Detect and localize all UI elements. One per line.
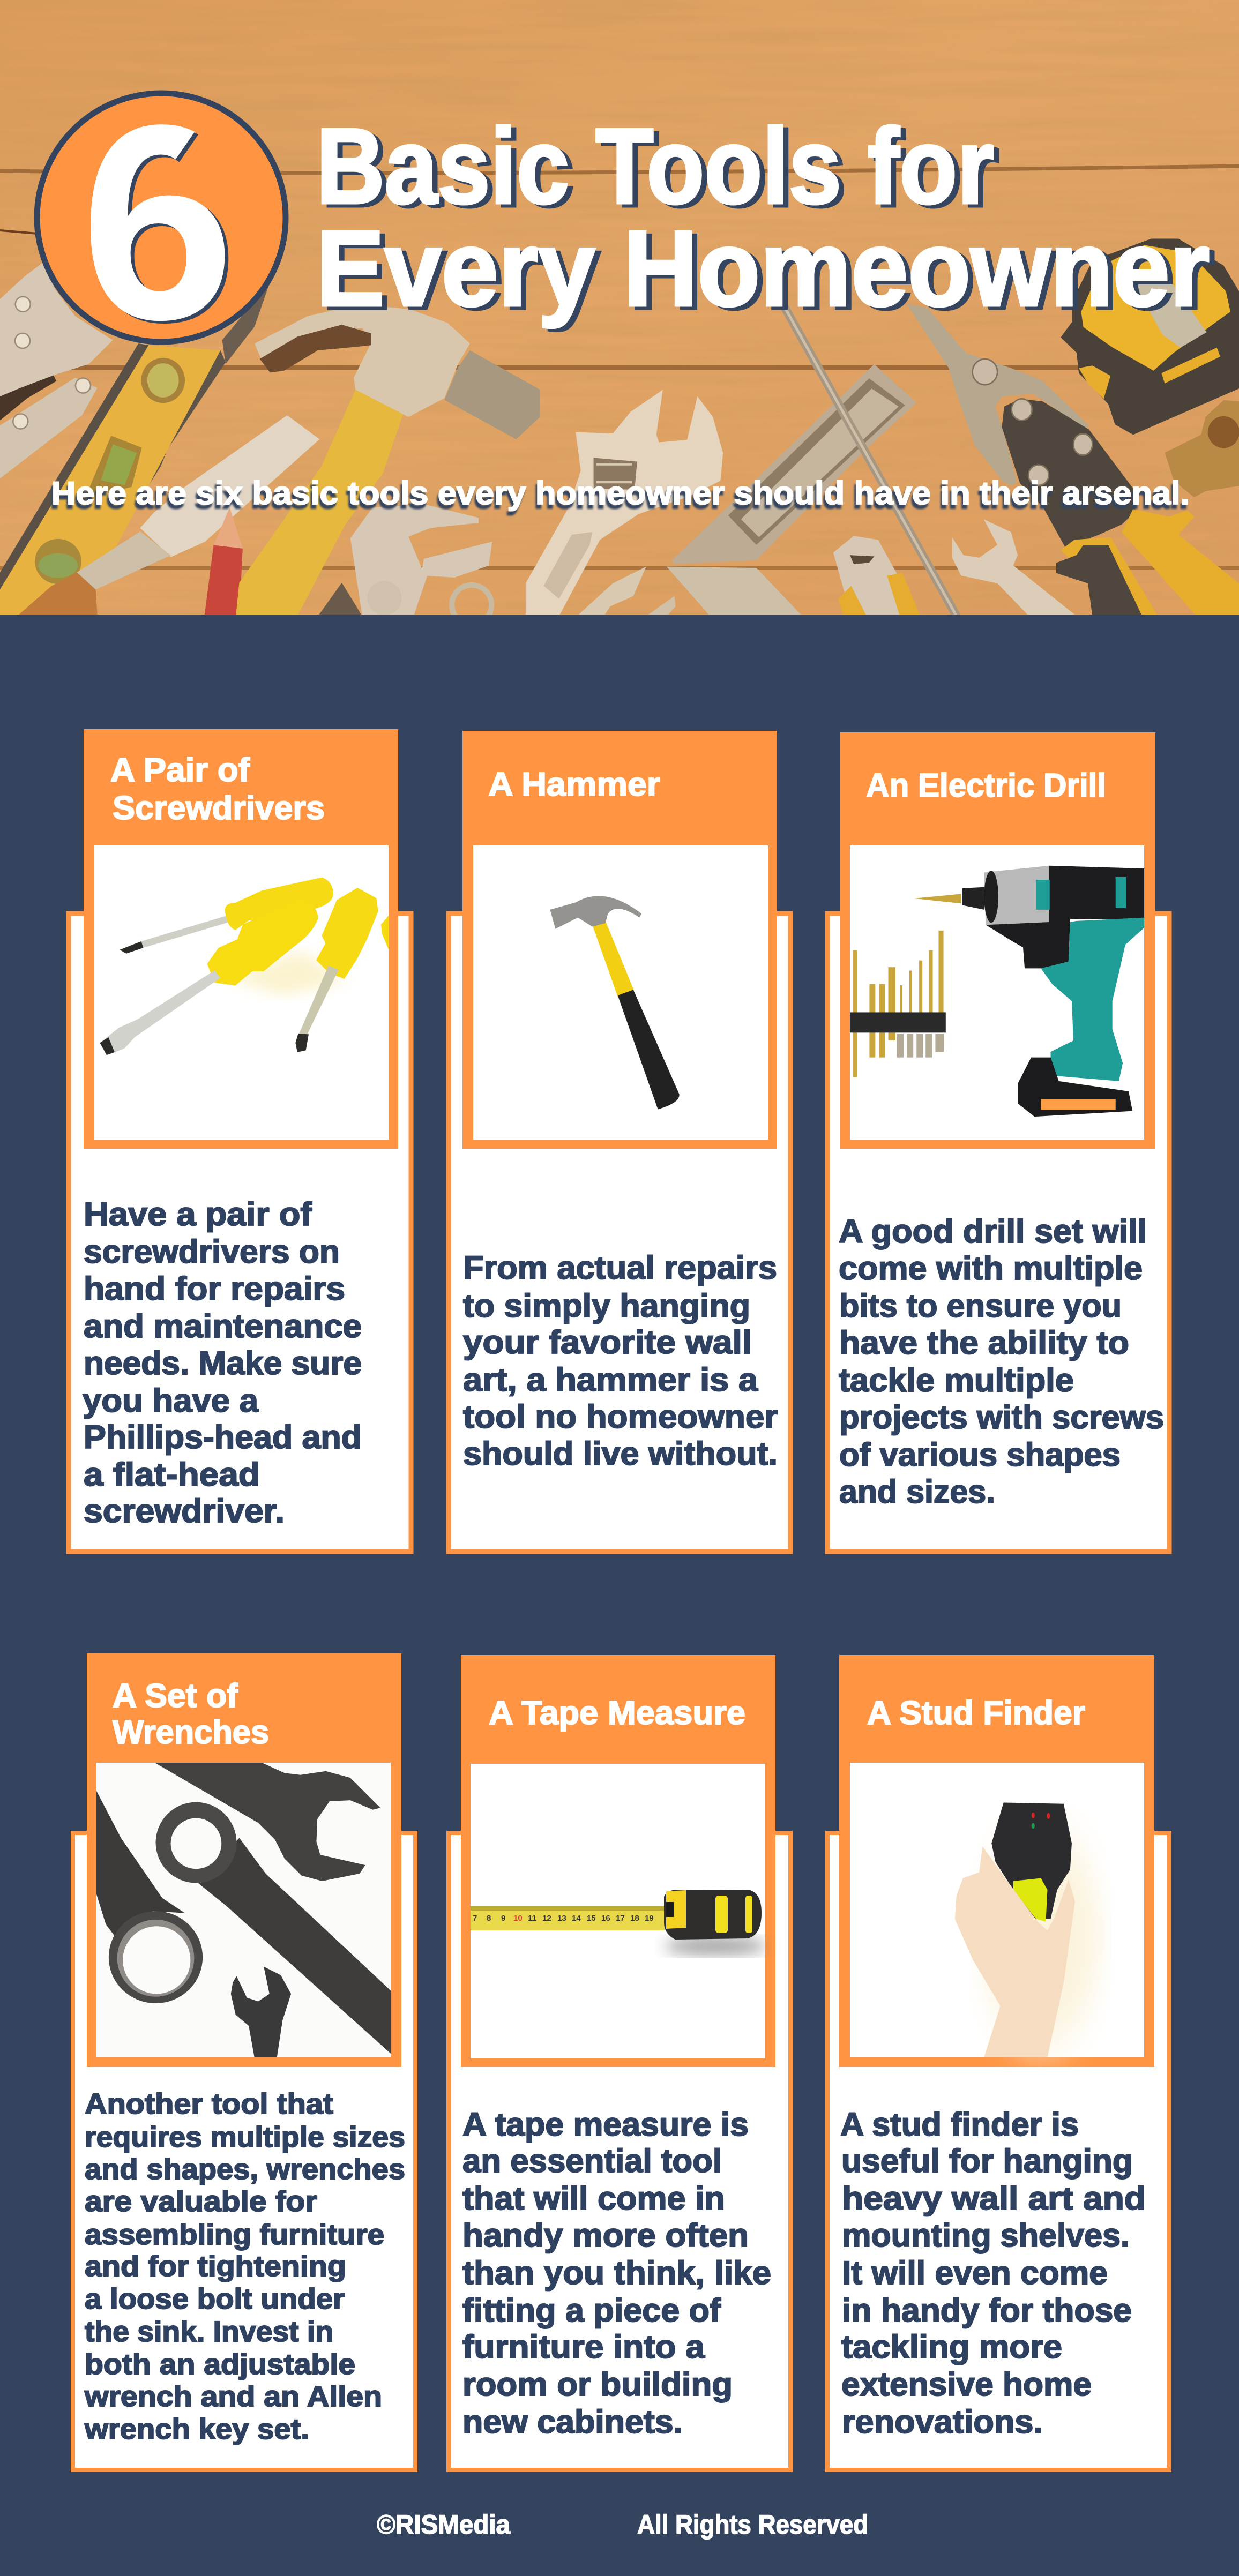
text: screwdrivers: a flat-head xyxy=(84,1456,260,1493)
text: stud finder: tackling more xyxy=(841,2328,1062,2365)
text: wrenches: requires multiple sizes xyxy=(85,2121,405,2153)
brass fitting xyxy=(1165,400,1239,498)
heading: tape measure: A Tape Measure xyxy=(489,1695,745,1732)
text: wrenches: a loose bolt under xyxy=(85,2283,345,2315)
text: wrenches: and for tightening xyxy=(85,2250,346,2282)
locking pliers xyxy=(0,371,56,421)
image: electric drill xyxy=(850,866,1144,1117)
yellow handles xyxy=(1122,509,1239,616)
text: stud finder: It will even come xyxy=(842,2255,1108,2291)
image: tape measure: 14 xyxy=(572,1914,581,1923)
panel: hammer xyxy=(449,731,790,1552)
small pliers jaw xyxy=(577,567,646,616)
text: tape measure: room or building xyxy=(462,2366,733,2402)
tin snips xyxy=(907,304,1089,486)
image: tape measure: 13 xyxy=(557,1914,566,1923)
title: Every Homeowner xyxy=(316,209,1210,328)
panel: tape measure xyxy=(449,1655,790,2470)
text: hammer: tool no homeowner xyxy=(463,1398,778,1435)
text: stud finder: extensive home xyxy=(841,2366,1092,2402)
text: drill: and sizes. xyxy=(839,1473,995,1510)
text: screwdrivers: hand for repairs xyxy=(84,1270,345,1307)
text: hammer: your favorite wall xyxy=(463,1324,752,1360)
text: wrenches: wrench key set. xyxy=(84,2413,309,2445)
level xyxy=(222,282,270,364)
text: wrenches: assembling furniture xyxy=(85,2219,384,2251)
text: tape measure: an essential tool xyxy=(462,2143,722,2179)
text: tape measure: that will come in xyxy=(462,2180,725,2216)
heading: screwdrivers xyxy=(110,752,325,827)
panel: electric drill xyxy=(827,732,1169,1552)
heading: drill: An Electric Drill xyxy=(866,767,1106,804)
image: tape measure: 9 xyxy=(501,1914,505,1923)
text: screwdrivers: screwdrivers on xyxy=(84,1233,340,1270)
text: stud finder: heavy wall art and xyxy=(842,2180,1146,2216)
text: drill: bits to ensure you xyxy=(839,1287,1122,1324)
text: screwdrivers: you have a xyxy=(83,1382,259,1419)
text: wrenches: are valuable for xyxy=(85,2185,317,2218)
footer: ©RISMedia xyxy=(377,2510,511,2540)
adjustable wrench xyxy=(526,390,723,616)
text: stud finder: in handy for those xyxy=(842,2292,1132,2328)
small wrench xyxy=(952,519,1077,616)
text: drill xyxy=(839,1213,1164,1510)
text: stud finder: mounting shelves. xyxy=(842,2217,1130,2253)
text: drill: come with multiple xyxy=(839,1250,1143,1286)
text: wrenches xyxy=(84,2088,405,2445)
text: wrenches: wrench and an Allen xyxy=(84,2380,382,2413)
text: screwdrivers: Have a pair of xyxy=(84,1196,312,1232)
text: wrenches: both an adjustable xyxy=(85,2348,355,2380)
heading: screwdrivers: Screwdrivers xyxy=(113,790,325,827)
subtitle: Here are six basic tools every homeowner should have in their arsenal. xyxy=(51,475,1190,511)
title xyxy=(316,107,1210,328)
text: screwdrivers xyxy=(83,1196,362,1529)
footer: All Rights Reserved xyxy=(637,2510,868,2540)
image: tape measure: 18 xyxy=(630,1914,639,1923)
image: tape measure: 15 xyxy=(587,1914,596,1923)
number 6: 6 xyxy=(80,67,235,377)
image: tape measure xyxy=(471,1890,766,1956)
text: wrenches: Another tool that xyxy=(85,2088,333,2120)
text: stud finder: useful for hanging xyxy=(841,2143,1133,2179)
heading: hammer: A Hammer xyxy=(488,766,660,803)
image: tape measure: 19 xyxy=(645,1914,654,1923)
text: screwdrivers: Phillips-head and xyxy=(84,1419,362,1455)
heading: screwdrivers: A Pair of xyxy=(110,752,250,789)
image: tape measure: 16 xyxy=(601,1914,610,1923)
groove pliers xyxy=(318,583,362,616)
image: tape measure: 8 xyxy=(487,1914,491,1923)
text: drill: projects with screws xyxy=(839,1399,1164,1435)
heading: stud finder: A Stud Finder xyxy=(867,1695,1085,1732)
pencil xyxy=(204,545,243,616)
text: wrenches: and shapes, wrenches xyxy=(85,2153,405,2185)
image: hammer xyxy=(550,896,680,1110)
text: wrenches: the sink. Invest in xyxy=(85,2316,333,2348)
text: stud finder: A stud finder is xyxy=(840,2106,1079,2143)
text: hammer: From actual repairs xyxy=(463,1249,777,1286)
text: hammer: to simply hanging xyxy=(463,1287,750,1324)
title: Basic Tools for xyxy=(316,107,994,226)
text: screwdrivers: needs. Make sure xyxy=(84,1345,362,1381)
image: tape measure: 12 xyxy=(542,1914,551,1923)
text: tape measure: than you think, like xyxy=(462,2255,771,2291)
panel: screwdrivers xyxy=(69,729,411,1552)
combination square xyxy=(667,567,802,616)
heading: wrenches: Wrenches xyxy=(113,1714,269,1751)
hammer xyxy=(236,390,404,616)
text: drill: of various shapes xyxy=(839,1436,1121,1473)
heading: wrenches: A Set of xyxy=(113,1678,238,1714)
text: hammer: should live without. xyxy=(463,1435,778,1472)
text: tape measure: new cabinets. xyxy=(462,2403,683,2440)
image: tape measure: 11 xyxy=(528,1914,536,1923)
box cutter xyxy=(833,536,920,616)
text: stud finder: renovations. xyxy=(842,2403,1043,2440)
text: hammer: art, a hammer is a xyxy=(463,1361,758,1398)
hero photo: tools on wood xyxy=(0,0,1239,625)
panel: stud finder xyxy=(827,1655,1169,2470)
image: tape measure: 17 xyxy=(616,1914,625,1923)
text: tape measure: fitting a piece of xyxy=(462,2292,721,2328)
text: tape measure xyxy=(462,2106,771,2440)
image: screwdrivers xyxy=(100,878,389,1055)
text: screwdrivers: screwdriver. xyxy=(84,1493,285,1529)
heading: wrenches xyxy=(113,1678,269,1751)
image: stud finder xyxy=(955,1803,1099,2057)
long screwdriver xyxy=(774,289,957,616)
tape measure xyxy=(1061,238,1239,435)
text: hammer xyxy=(463,1249,778,1472)
text: drill: tackle multiple xyxy=(839,1362,1074,1398)
panel: wrenches xyxy=(73,1653,415,2470)
image: tape measure: 7 xyxy=(473,1914,477,1923)
footer xyxy=(377,2510,868,2540)
badge: orange circle with number 6 xyxy=(37,67,286,377)
image: tape measure: 10 xyxy=(513,1914,523,1923)
text: tape measure: A tape measure is xyxy=(462,2106,749,2143)
text: screwdrivers: and maintenance xyxy=(84,1308,362,1344)
text: tape measure: handy more often xyxy=(462,2217,749,2253)
text: drill: A good drill set will xyxy=(839,1213,1147,1249)
text: drill: have the ability to xyxy=(839,1324,1129,1361)
chisel xyxy=(140,415,319,557)
text: tape measure: furniture into a xyxy=(462,2328,705,2365)
text: stud finder xyxy=(840,2106,1146,2440)
image: wrenches xyxy=(96,1763,391,2057)
